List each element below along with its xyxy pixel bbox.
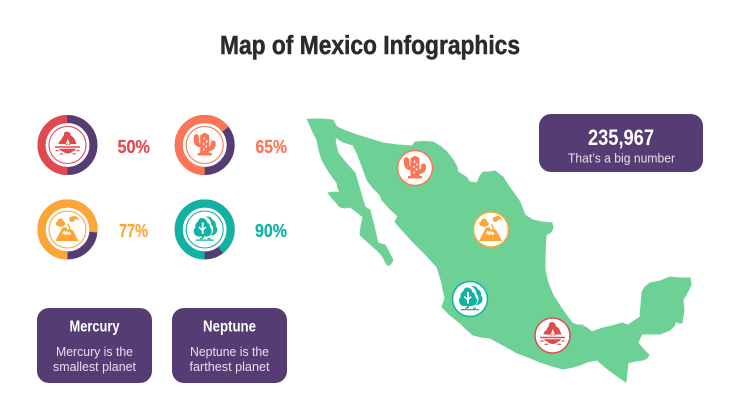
icon: map tree marker xyxy=(452,282,488,316)
panel: Neptune xyxy=(172,308,287,383)
text: Mercury description: smallest planet xyxy=(53,360,137,374)
donut ring 50% xyxy=(42,119,94,171)
icon: cactus xyxy=(186,126,223,164)
icon: volcano xyxy=(49,211,86,248)
icon: map cactus marker xyxy=(398,150,432,186)
donut ring 77% xyxy=(42,204,94,256)
percentage 90%: 90% xyxy=(255,221,287,241)
panel: donut 77% xyxy=(42,204,148,256)
icon: map volcano marker xyxy=(474,212,508,247)
panel: donut 90% xyxy=(179,204,287,256)
map of Mexico xyxy=(307,119,691,382)
text: Neptune description: Neptune is the xyxy=(190,345,269,359)
panel: Mercury xyxy=(37,308,152,383)
panel: donut 65% xyxy=(179,119,287,171)
icon: map island boat marker xyxy=(535,318,570,353)
number 235,967: 235,967 xyxy=(588,125,654,150)
icon: island boat xyxy=(49,126,86,164)
heading: Mercury: Mercury xyxy=(70,318,120,336)
panel: donut 50% xyxy=(42,119,150,171)
percentage 65%: 65% xyxy=(256,137,287,157)
text: Mercury description: Mercury is the xyxy=(56,345,133,359)
donut ring 90% xyxy=(179,204,231,256)
percentage 50%: 50% xyxy=(118,137,150,157)
caption: That’s a big number xyxy=(568,152,675,166)
text: Neptune description: farthest planet xyxy=(190,360,270,374)
donut ring 65% xyxy=(179,119,231,171)
heading: Neptune: Neptune xyxy=(203,318,256,336)
title: Map of Mexico Infographics xyxy=(220,32,520,60)
text: Neptune description xyxy=(190,345,270,374)
icon: tree xyxy=(186,211,223,248)
text: Mercury description xyxy=(53,345,137,374)
percentage 77%: 77% xyxy=(119,221,148,241)
callout: big number xyxy=(539,114,703,172)
